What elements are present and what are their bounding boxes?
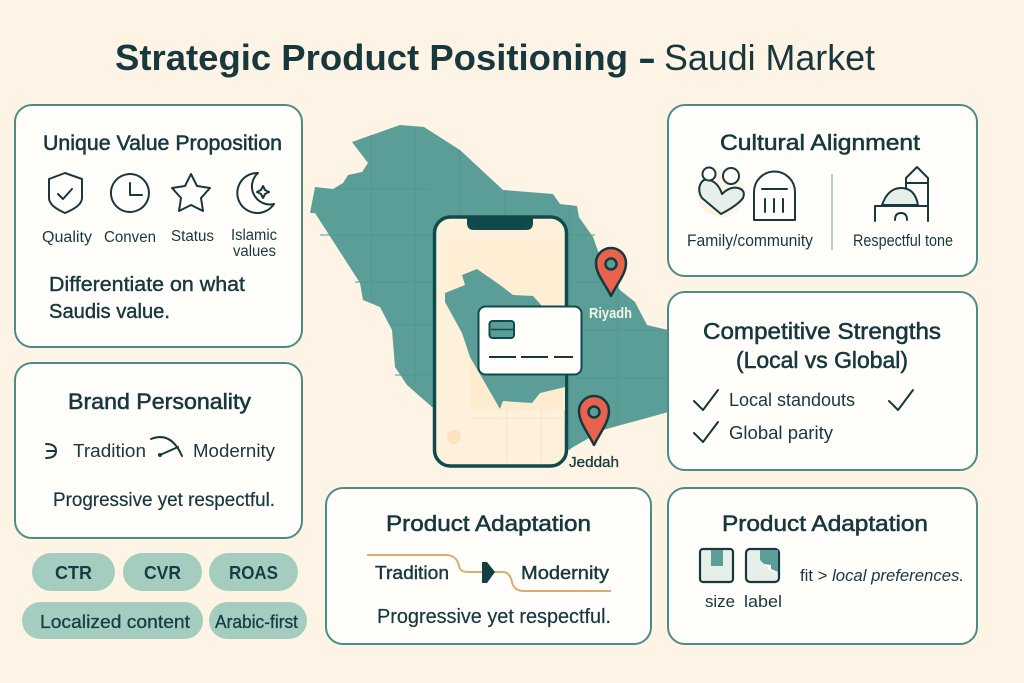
divider	[831, 174, 833, 250]
icon: size box	[700, 549, 733, 582]
metric chips	[22, 553, 307, 639]
icon: mosque	[875, 167, 928, 221]
phone	[434, 216, 566, 466]
icon: tradition glyph	[46, 444, 56, 458]
metric chips: Localized content	[40, 611, 190, 632]
panel: brand personality: Modernity	[193, 440, 276, 461]
metric chips: CVR	[144, 563, 181, 583]
pin: Riyadh	[589, 248, 632, 322]
icon: label box	[746, 549, 779, 582]
title: Strategic Product Positioning	[115, 37, 628, 78]
text block: Saudis value.	[49, 300, 170, 323]
text block	[49, 273, 245, 323]
label: status: Status	[171, 228, 214, 245]
panel: product adaptation fit: size	[705, 593, 735, 611]
icon: shield	[49, 173, 82, 213]
icon: arch building	[754, 172, 795, 220]
product card	[478, 306, 582, 374]
metric chips: Arabic-first	[215, 612, 298, 632]
panel: brand personality: Brand Personality	[68, 389, 251, 414]
panel: product adaptation slider: Tradition	[375, 562, 449, 583]
title	[115, 37, 875, 78]
panel: competitive strengths: (Local vs Global)	[736, 347, 908, 373]
connector line	[367, 555, 611, 591]
label: islamic values: Islamic	[231, 227, 277, 244]
metric chips: CTR	[55, 563, 92, 583]
icon: family heart	[697, 168, 745, 217]
panel: product adaptation slider	[326, 488, 651, 644]
pin: Riyadh: Riyadh	[589, 306, 632, 322]
text block: Differentiate on what	[49, 273, 245, 296]
pin: Jeddah	[569, 396, 619, 471]
icon: checks	[694, 390, 913, 442]
label: islamic values	[231, 227, 277, 260]
panel: competitive strengths: Competitive Strengths	[703, 318, 941, 344]
panel: product adaptation fit: fit > local preferences.	[800, 566, 964, 585]
arrow marker	[482, 562, 495, 583]
panel: cultural alignment	[668, 105, 977, 276]
panel: competitive strengths: Global parity	[729, 422, 834, 443]
icon: clock	[111, 174, 149, 212]
title: -	[638, 37, 656, 78]
panel: cultural alignment: Respectful tone	[853, 232, 953, 250]
mini map on phone screen	[445, 269, 565, 409]
panel: product adaptation slider: Progressive yet respectful.	[377, 606, 611, 628]
label: islamic values: values	[233, 243, 276, 260]
panel: competitive strengths: Local standouts	[729, 389, 855, 410]
metric chips: ROAS	[229, 563, 278, 583]
panel: product adaptation slider: Modernity	[521, 562, 610, 583]
panel: product adaptation fit: label	[744, 593, 782, 611]
panel: unique value proposition	[15, 105, 302, 347]
panel: product adaptation fit	[668, 488, 977, 644]
panel: product adaptation fit: Product Adaptation	[722, 511, 928, 536]
panel: brand personality: Progressive yet respectful.	[53, 489, 275, 511]
map of Saudi Arabia	[310, 125, 672, 450]
panel: product adaptation slider: Product Adaptation	[386, 511, 591, 536]
icon: star	[172, 174, 210, 211]
panel: competitive strengths	[668, 292, 977, 470]
panel: cultural alignment: Family/community	[687, 232, 814, 250]
icon: crescent and star	[237, 173, 274, 213]
panel: brand personality	[15, 363, 302, 538]
pin: Jeddah: Jeddah	[569, 454, 619, 471]
label: quality: Quality	[42, 229, 92, 246]
icon: gauge	[151, 437, 182, 457]
panel: unique value proposition: Unique Value Proposition	[43, 131, 282, 155]
label: convenience: Conven	[104, 229, 156, 246]
panel: brand personality: Tradition	[73, 440, 146, 461]
title: Saudi Market	[664, 37, 875, 78]
panel: cultural alignment: Cultural Alignment	[720, 130, 920, 155]
